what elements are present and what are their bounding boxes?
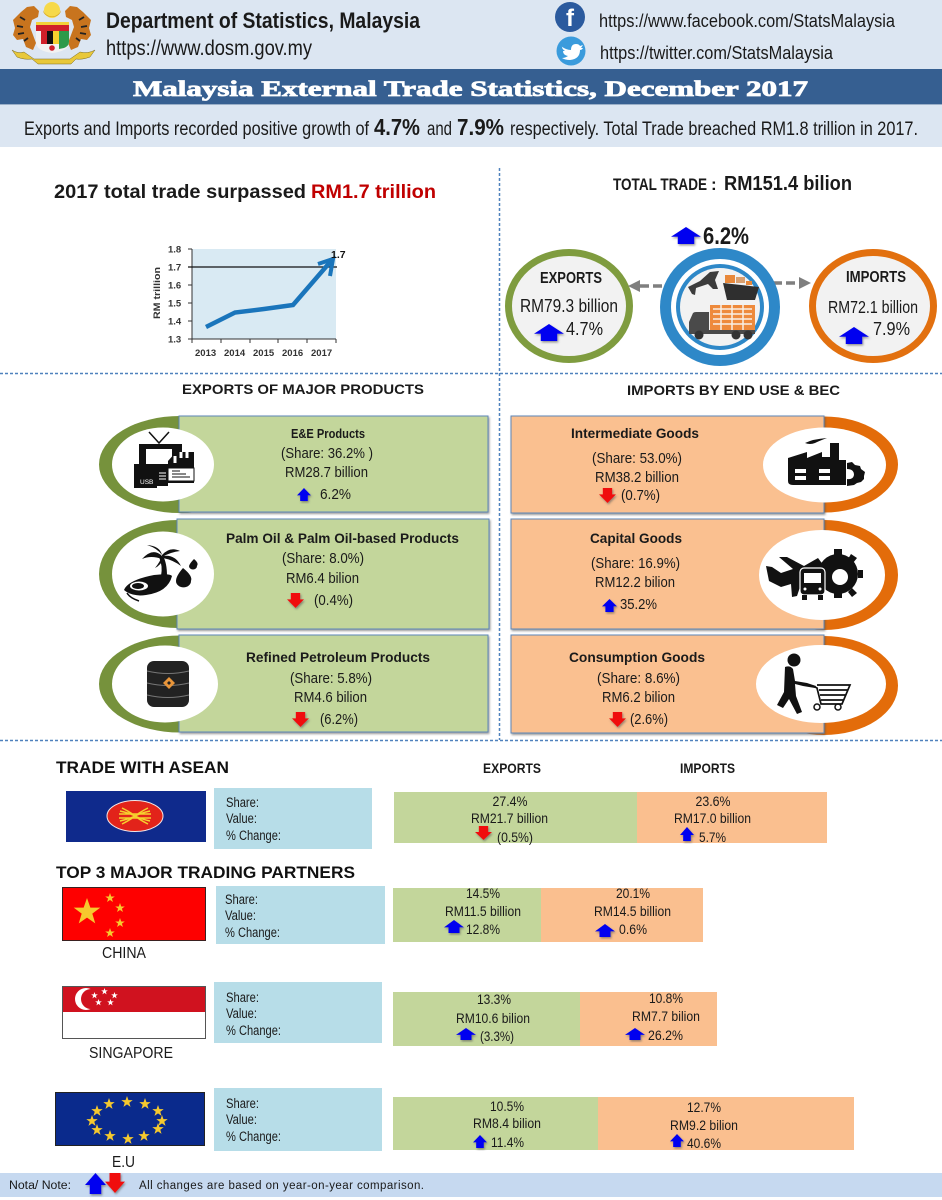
heading: trade with ASEAN: TRADE WITH ASEAN [56,758,229,777]
legend box: ASEAN: Share: [226,795,259,810]
label: Singapore: SINGAPORE [89,1045,173,1062]
legend box: Singapore: % Change: [226,1023,281,1038]
panel: palm oil products [99,519,489,629]
summary strip [0,105,942,147]
panel: refined petroleum products: (Share: 5.8%) [290,670,372,687]
bar: Singapore exports and imports [393,990,717,1046]
bar: China exports and imports: 0.6% [619,921,647,937]
legend box: ASEAN: % Change: [226,828,281,843]
label: China: CHINA [102,945,147,962]
bar: E.U exports and imports: RM8.4 bilion [473,1115,541,1131]
bar: ASEAN exports and imports: RM17.0 billion [674,810,751,826]
icon: Malaysia coat of arms [12,2,95,64]
flag: European Union [56,1092,204,1146]
flag: ASEAN [66,791,206,842]
panel: intermediate goods: Intermediate Goods [571,426,699,441]
bar: Singapore exports and imports: (3.3%) [480,1028,514,1044]
icon: facebook [555,2,585,32]
summary strip: and [427,119,452,140]
circle: imports: RM72.1 billion [828,297,918,317]
line chart: total trade 2013-2017: 2015 [253,348,275,359]
bar: E.U exports and imports: 40.6% [687,1135,721,1151]
panel: palm oil products: RM6.4 bilion [286,570,359,587]
panel: palm oil products: (Share: 8.0%) [282,550,364,567]
summary strip: 7.9% [457,114,504,140]
legend box: E.U: Value: [226,1112,257,1127]
bar: Singapore exports and imports: RM7.7 bilion [632,1008,700,1024]
icon: facebook: f [566,5,575,32]
panel: refined petroleum products [99,635,488,732]
panel: palm oil products: Palm Oil & Palm Oil-based Products [226,531,459,546]
bar: China exports and imports: 14.5% [466,885,500,901]
line chart: total trade 2013-2017: 2014 [224,348,246,359]
bar: ASEAN exports and imports: RM21.7 billion [471,810,548,826]
circle: total trade with transport icon [660,248,780,366]
twitter url: https://twitter.com/StatsMalaysia [600,43,834,63]
legend box: E.U: % Change: [226,1129,281,1144]
panel: E&E products: 6.2% [320,486,351,503]
panel: E&E products: E&E Products [291,426,365,441]
icon: palm and oil drops [124,545,198,601]
bar: China exports and imports: 12.8% [466,921,500,937]
bar: Singapore exports and imports: RM10.6 bilion [456,1010,530,1026]
line chart: total trade 2013-2017: 2013 [195,348,216,359]
panel: E&E products: (Share: 36.2% ) [281,445,373,462]
heading: total trade surpassed: RM1.7 trillion [311,182,436,203]
bar: China exports and imports: RM14.5 billion [594,903,671,919]
panel: refined petroleum products: Refined Petroleum Products [246,650,430,665]
header band [0,0,942,69]
legend box: China: Share: [225,892,258,907]
bar: ASEAN exports and imports: 5.7% [699,829,726,845]
line chart: total trade 2013-2017 [152,244,346,359]
legend box: Singapore: Share: [226,990,259,1005]
heading: total trade surpassed [54,182,436,203]
bar: E.U exports and imports [393,1097,854,1151]
panel: intermediate goods: (0.7%) [621,487,660,504]
legend box: E.U: Share: [226,1096,259,1111]
icon: delivery truck [689,305,755,340]
icon: electronics [134,432,194,488]
panel: capital goods: RM12.2 bilion [595,574,675,591]
line chart: total trade 2013-2017: 2016 [282,348,303,359]
panel: intermediate goods: (Share: 53.0%) [592,450,682,467]
panel: intermediate goods [511,416,898,513]
panel: capital goods: (Share: 16.9%) [591,555,680,572]
arrow: to exports [628,280,662,292]
panel: consumption goods: (2.6%) [630,711,668,728]
bar: E.U exports and imports: 12.7% [687,1099,721,1115]
line chart: total trade 2013-2017: 1.7 [168,262,181,274]
line chart: total trade 2013-2017: 1.8 [168,244,181,256]
bar: ASEAN exports and imports: 27.4% [492,793,528,809]
heading: total trade value [613,172,852,195]
legend box: China: % Change: [225,925,280,940]
legend box: Singapore: Value: [226,1006,257,1021]
circle: exports: 4.7% [566,319,603,339]
line chart: total trade 2013-2017: RM trillion [152,267,163,319]
footer note [0,1173,942,1197]
legend box: China [216,886,385,944]
heading: total trade value: : [711,175,717,194]
heading: total trade surpassed: 2017 total trade surpassed [54,182,306,203]
icon: oil barrel [147,661,189,707]
line chart: total trade 2013-2017: 1.5 [168,298,182,310]
heading: top 3 trading partners: TOP 3 MAJOR TRADING PARTNERS [56,863,355,882]
panel: capital goods: Capital Goods [590,531,682,546]
heading: imports by end use: IMPORTS BY END USE & BEC [627,382,840,398]
legend box: ASEAN: Value: [226,811,257,826]
panel: capital goods [511,519,898,630]
summary strip: Exports and Imports recorded positive growth of [24,119,370,140]
bar: China exports and imports: 20.1% [616,885,650,901]
line chart: total trade 2013-2017: 1.3 [168,334,181,346]
panel: consumption goods: Consumption Goods [569,650,705,665]
flag: China [62,888,206,940]
heading: total trade value: TOTAL TRADE [613,175,707,194]
circle: imports: 7.9% [873,319,910,339]
panel: capital goods: 35.2% [620,596,657,613]
panel: refined petroleum products: RM4.6 bilion [294,689,367,706]
bar: Singapore exports and imports: 26.2% [648,1027,683,1043]
icon: plane [688,271,719,295]
legend box: China: Value: [225,908,256,923]
label: E.U: E.U [112,1154,135,1171]
panel: consumption goods: RM6.2 bilion [602,689,675,706]
organisation name: Department of Statistics, Malaysia [106,8,421,33]
panel: consumption goods: (Share: 8.6%) [597,670,680,687]
icon: factory [788,438,865,486]
column heading: exports: EXPORTS [483,760,541,776]
circle: exports: EXPORTS [540,270,602,287]
line chart: total trade 2013-2017: 1.6 [168,280,181,292]
panel: refined petroleum products: (6.2%) [320,711,358,728]
line chart: total trade 2013-2017: 1.7 [331,249,346,261]
icon: person with shopping cart [777,654,850,714]
bar: Singapore exports and imports: 13.3% [477,991,511,1007]
bar: ASEAN exports and imports: (0.5%) [497,829,533,845]
icon: electronics: USB [140,479,153,486]
icon: twitter [556,36,586,66]
icon: ship with containers [723,275,759,300]
panel: intermediate goods: RM38.2 billion [595,469,679,486]
line chart: total trade 2013-2017: 2017 [311,348,332,359]
bar: ASEAN exports and imports: 23.6% [696,793,730,809]
circle: imports: IMPORTS [846,269,906,286]
website url: https://www.dosm.gov.my [106,37,312,60]
legend box: ASEAN [214,788,372,849]
total trade growth: 6.2% [703,223,749,250]
bar: ASEAN exports and imports [394,792,827,845]
footer note: All changes are based on year-on-year comparison. [139,1180,424,1192]
circle: exports: RM79.3 billion [520,296,618,316]
line chart: total trade 2013-2017: 1.4 [168,316,182,328]
panel: E&E products: RM28.7 billion [285,464,368,481]
total trade growth [671,223,749,250]
circle: imports [812,252,934,360]
panel: E&E products [99,416,488,513]
heading: total trade value: RM151.4 bilion [724,172,852,195]
facebook url: https://www.facebook.com/StatsMalaysia [599,10,896,31]
arrow: to imports [773,277,811,289]
title banner: Malaysia External Trade Statistics, December 2017 [133,76,808,101]
circle: exports [508,252,630,360]
bar: China exports and imports: RM11.5 billion [445,903,521,919]
flag: Singapore [62,986,206,1038]
bar: Singapore exports and imports: 10.8% [649,990,683,1006]
panel: palm oil products: (0.4%) [314,592,353,609]
column heading: imports: IMPORTS [680,760,735,776]
footer note: Nota/ Note: [9,1180,71,1192]
bar: China exports and imports [393,885,703,942]
panel: consumption goods [511,635,898,735]
legend box: Singapore [214,982,382,1043]
heading: exports of major products: EXPORTS OF MAJOR PRODUCTS [182,381,424,397]
title banner [0,69,942,104]
bar: E.U exports and imports: RM9.2 bilion [670,1117,738,1133]
bar: E.U exports and imports: 10.5% [490,1098,524,1114]
icon: plane, bus and gear [766,549,863,600]
legend box: E.U [214,1088,382,1151]
bar: E.U exports and imports: 11.4% [491,1134,524,1150]
summary strip: 4.7% [374,114,420,140]
